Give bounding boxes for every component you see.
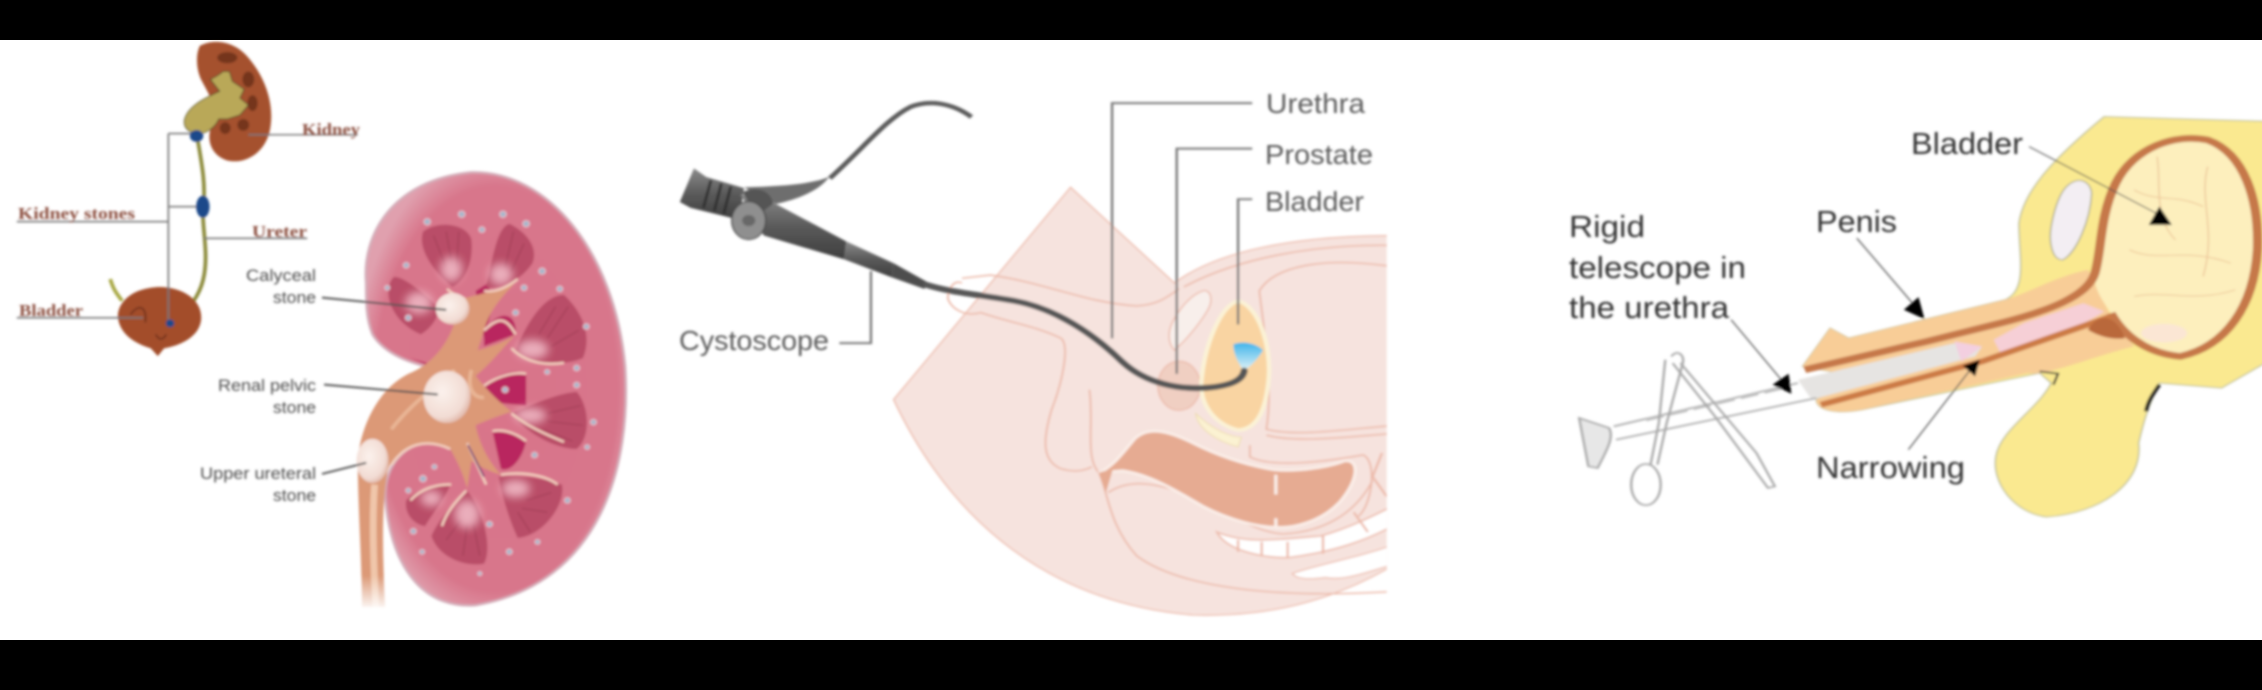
pelvic cross-section illustration: [894, 187, 1396, 615]
label: Bladder: Bladder: [1911, 126, 2023, 161]
label: Rigid telescope in the urethra: telescope in: [1569, 250, 1746, 285]
cystoscope instrument: [680, 103, 1252, 388]
label: Upper ureteral stone: Upper ureteral: [200, 464, 316, 483]
label: Rigid telescope in the urethra: the urethra: [1569, 290, 1730, 325]
label: Bladder: Bladder: [1265, 186, 1364, 217]
large kidney cross-section: [322, 172, 626, 611]
label: Penis: Penis: [1816, 204, 1897, 239]
label: Upper ureteral stone: stone: [273, 486, 316, 505]
panel: kidney stones anatomy: [17, 42, 626, 611]
bladder and penis illustration: [1798, 117, 2262, 517]
rigid telescope instrument: [1579, 353, 1816, 505]
label: Renal pelvic stone: Renal pelvic: [218, 376, 317, 395]
panel: rigid telescope urethrotomy: [1569, 117, 2262, 517]
panel: cystoscope in the urethra: [679, 88, 1396, 615]
label: Bladder: Bladder: [19, 301, 83, 320]
label: Calyceal stone: Calyceal: [246, 266, 316, 285]
label: Calyceal stone: stone: [273, 288, 316, 307]
urinary tract diagram: [17, 42, 358, 356]
label: Narrowing: Narrowing: [1816, 450, 1965, 485]
label: Prostate: Prostate: [1265, 139, 1373, 170]
label: Urethra: Urethra: [1266, 88, 1365, 119]
label: Rigid telescope in the urethra: Rigid: [1569, 209, 1645, 244]
label: Kidney: Kidney: [302, 120, 361, 139]
pointer lines and arrowheads: [1731, 147, 2172, 450]
label: Ureter: Ureter: [252, 222, 308, 241]
label: Cystoscope: Cystoscope: [679, 325, 829, 356]
label: Kidney stones: Kidney stones: [18, 204, 135, 223]
label: Renal pelvic stone: stone: [273, 398, 316, 417]
